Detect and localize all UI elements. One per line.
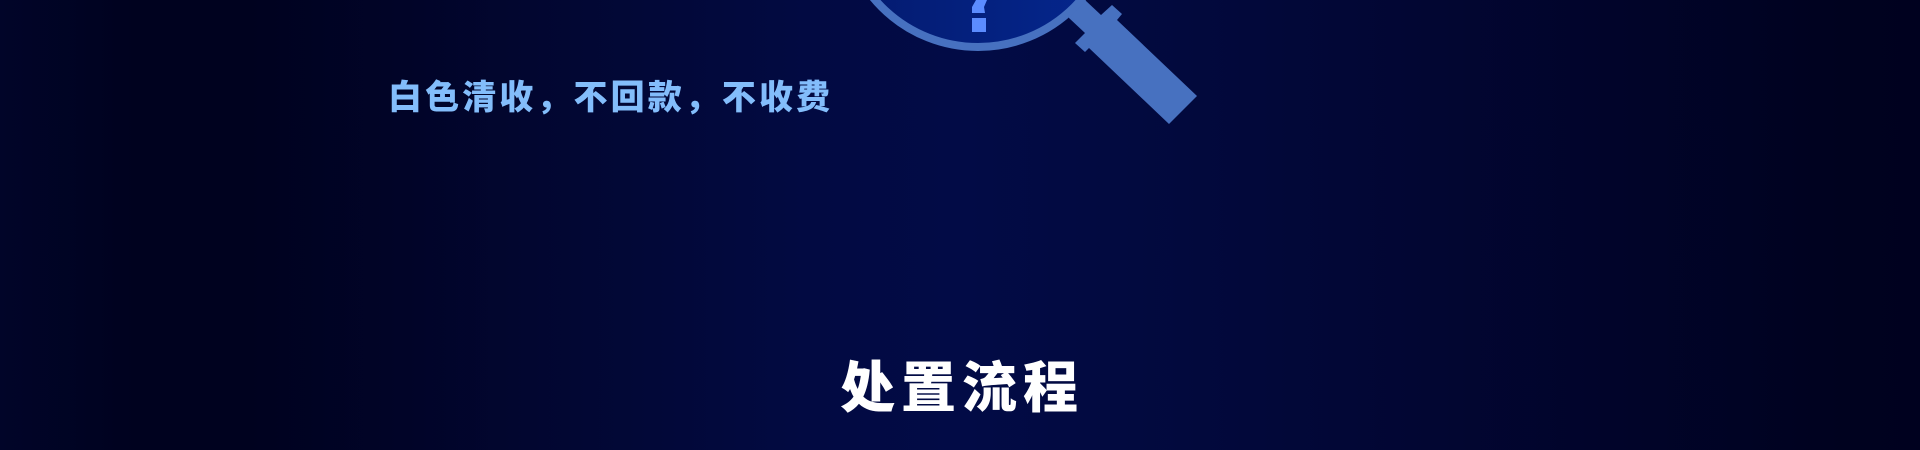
text: white-label collection note: 白色清收，不回款，不收费: [388, 79, 833, 117]
heading: disposal process: 处置流程: [840, 357, 1084, 419]
